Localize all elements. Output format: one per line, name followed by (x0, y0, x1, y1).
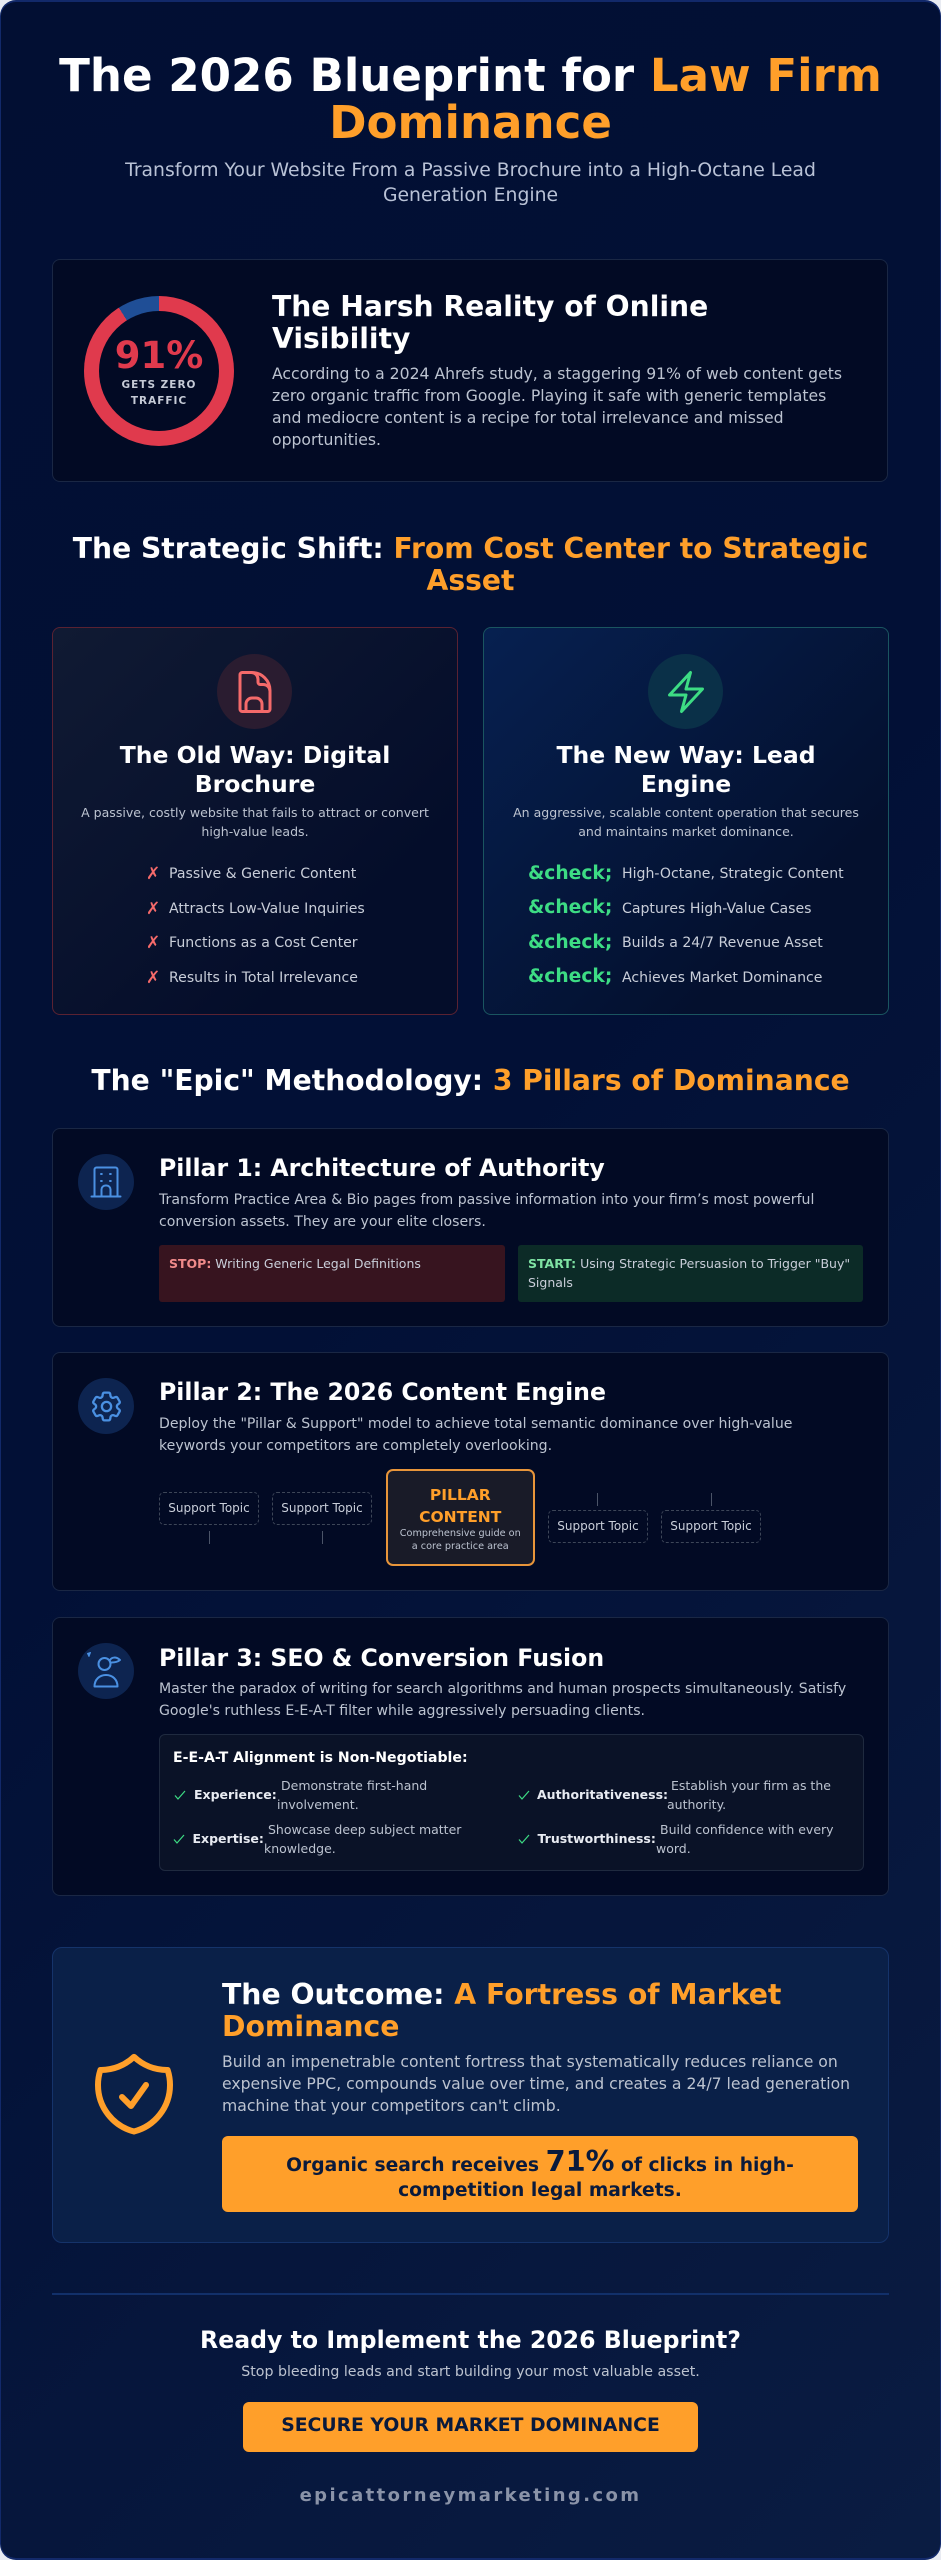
heading: strategic shift (72, 532, 868, 597)
item: Achieves Market Dominance (622, 970, 822, 986)
callout: stop: STOP: Writing Generic Legal Definitions (169, 1256, 421, 1271)
body: outcome: machine that your competitors can't climb. (222, 2096, 561, 2115)
icon: shield (95, 2054, 173, 2134)
stat callout: 71%: competition legal markets. (398, 2180, 682, 2201)
body: outcome: expensive PPC, compounds value over time, and creates a 24/7 lead generation (222, 2074, 850, 2093)
eeat item: experience: involvement. (277, 1797, 359, 1812)
title: Dominance (329, 96, 612, 149)
support topic 1 (159, 1492, 259, 1525)
heading: call to action: Ready to Implement the 2026 Blueprint? (200, 2326, 741, 2354)
item: &check; (528, 966, 612, 987)
panel: old way (52, 627, 458, 1015)
eeat item: expertise: Showcase deep subject matter (268, 1822, 461, 1837)
body: pillar 2 (159, 1416, 792, 1454)
donut label: GETS ZERO (122, 379, 196, 391)
heading: new way: The New Way: Lead (556, 741, 816, 769)
donut chart: 91 percent (84, 296, 234, 446)
body text: harsh reality: zero organic traffic from Google. Playing it safe with generic templates (272, 386, 826, 405)
heading: outcome (222, 1978, 781, 2043)
body: pillar 3: Master the paradox of writing for search algorithms and human prospects simultaneously. Satisfy (159, 1681, 846, 1697)
eeat item: experience: Experience: (194, 1787, 277, 1802)
heading: outcome: Dominance (222, 2010, 399, 2043)
body: pillar 2: Deploy the "Pillar & Support" model to achieve total semantic dominance over high-value (159, 1416, 792, 1432)
heading: old way: The Old Way: Digital (120, 741, 390, 769)
eeat item: authoritativeness: Authoritativeness: (537, 1787, 668, 1802)
support topic 3 (548, 1510, 648, 1543)
icon: bolt (648, 654, 723, 729)
body: outcome: Build an impenetrable content fortress that systematically reduces reliance on (222, 2052, 838, 2071)
panel: eeat (159, 1734, 864, 1871)
description: new way: An aggressive, scalable content operation that secures (513, 805, 859, 820)
pillar sub-label (400, 1528, 521, 1552)
support topic 1: Support Topic (168, 1501, 250, 1515)
title (59, 49, 882, 149)
description: old way: high-value leads. (201, 824, 309, 839)
icon: person (78, 1643, 134, 1699)
stat callout: 71% (222, 2136, 858, 2212)
body: pillar 1: conversion assets. They are your elite closers. (159, 1214, 486, 1230)
panel: outcome (52, 1947, 889, 2243)
body text: harsh reality: According to a 2024 Ahrefs study, a staggering 91% of web content gets (272, 364, 842, 383)
eeat item: expertise (174, 1822, 462, 1856)
item: &check; (528, 897, 612, 918)
eeat item: authoritativeness (518, 1778, 831, 1812)
panel: pillar 2 (52, 1352, 889, 1591)
callout: start: START: Using Strategic Persuasion to Trigger "Buy" (528, 1256, 850, 1271)
donut hole (99, 311, 219, 431)
body: pillar 3: Google's ruthless E-E-A-T filter while aggressively persuading clients. (159, 1703, 645, 1719)
donut label: TRAFFIC (131, 395, 187, 407)
panel: pillar 3 (52, 1617, 889, 1896)
eeat item: authoritativeness: authority. (667, 1797, 726, 1812)
support topic 2 (272, 1492, 372, 1525)
pillar label (419, 1486, 502, 1526)
eeat item: expertise: knowledge. (264, 1841, 336, 1856)
item: &check; (528, 862, 612, 884)
body text: harsh reality (272, 364, 842, 449)
eeat item: expertise: Expertise: (192, 1831, 264, 1846)
item: Results in Total Irrelevance (169, 970, 358, 986)
item: ✗ (146, 968, 160, 988)
body: pillar 2: keywords your competitors are completely overlooking. (159, 1438, 552, 1454)
callout: start: Signals (528, 1275, 573, 1290)
item: ✗ (146, 933, 160, 953)
eeat item: experience: Demonstrate first-hand (281, 1778, 427, 1793)
item: &check; (528, 932, 612, 952)
heading: new way: Engine (641, 770, 731, 798)
support topic 4 (661, 1510, 761, 1543)
item: Builds a 24/7 Revenue Asset (622, 935, 823, 951)
pillar content box (386, 1469, 535, 1566)
item (528, 862, 844, 884)
eeat item: trustworthiness (518, 1822, 834, 1856)
support topic 3: Support Topic (557, 1519, 639, 1533)
list: old way (146, 864, 365, 988)
heading: new way (556, 741, 816, 798)
heading: outcome: The Outcome: A Fortress of Market (222, 1978, 781, 2011)
eeat item: experience (174, 1778, 427, 1812)
description: new way (513, 805, 859, 839)
panel: pillar 1 (52, 1128, 889, 1327)
item: High-Octane, Strategic Content (622, 866, 844, 882)
body text: harsh reality: and mediocre content is a recipe for total irrelevance and missed (272, 408, 784, 427)
body: pillar 1 (158, 1192, 814, 1230)
pillar sub-label: Comprehensive guide on (400, 1528, 521, 1538)
heading: pillar 1: Pillar 1: Architecture of Authority (159, 1154, 605, 1182)
pillar label: CONTENT (419, 1508, 501, 1526)
item: ✗ (146, 898, 160, 918)
stat: 91%: 91% (115, 334, 203, 377)
heading: old way (120, 741, 390, 798)
heading: old way: Brochure (195, 770, 315, 798)
item: Captures High-Value Cases (622, 900, 812, 916)
item (528, 932, 823, 952)
body: outcome (222, 2052, 850, 2115)
divider (52, 2293, 889, 2295)
item (528, 966, 822, 987)
body text: harsh reality: opportunities. (272, 430, 381, 449)
item: Attracts Low-Value Inquiries (169, 900, 365, 916)
eeat item: trustworthiness: word. (656, 1841, 691, 1856)
support topic 4: Support Topic (670, 1519, 752, 1533)
heading: strategic shift: Asset (427, 564, 514, 597)
item: Functions as a Cost Center (169, 935, 358, 951)
heading: epic methodology: The "Epic" Methodology: 3 Pillars of Dominance (91, 1064, 850, 1097)
title: The 2026 Blueprint for Law Firm (59, 49, 882, 102)
heading: strategic shift: The Strategic Shift: From Cost Center to Strategic (73, 532, 868, 565)
eeat heading: E-E-A-T Alignment is Non-Negotiable: (173, 1750, 468, 1766)
body: pillar 1: Transform Practice Area & Bio pages from passive information into your firm’s most powerful (159, 1192, 814, 1208)
list: new way (528, 862, 844, 987)
heading: pillar 3: Pillar 3: SEO & Conversion Fusion (159, 1644, 604, 1672)
eeat item: trustworthiness: Build confidence with every (660, 1822, 834, 1837)
panel: new way (483, 627, 889, 1015)
button: call to action: SECURE YOUR MARKET DOMINANCE (281, 2415, 660, 2436)
stat callout: 71%: Organic search receives 71% of clicks in high- (286, 2144, 794, 2178)
item: Passive & Generic Content (169, 866, 356, 882)
panel: harsh reality (52, 259, 888, 482)
item: ✗ (146, 864, 160, 884)
button: call to action (243, 2402, 698, 2452)
callout: start (518, 1245, 863, 1302)
subtitle (125, 160, 816, 206)
body: pillar 3 (159, 1681, 846, 1719)
icon: gear (78, 1378, 134, 1434)
icon: building (78, 1154, 134, 1210)
subtitle: Generation Engine (383, 185, 558, 206)
description: old way: A passive, costly website that fails to attract or convert (81, 805, 429, 820)
pillar sub-label: a core practice area (412, 1540, 509, 1552)
description: old way (81, 805, 429, 839)
eeat item: trustworthiness: Trustworthiness: (538, 1831, 656, 1846)
item (528, 897, 812, 918)
support topic 2: Support Topic (281, 1501, 363, 1515)
eeat item: authoritativeness: Establish your firm as the (671, 1778, 831, 1793)
brand url: epicattorneymarketing.com (300, 2485, 641, 2506)
heading: harsh reality: The Harsh Reality of Online (272, 290, 708, 323)
callout: stop (159, 1245, 505, 1302)
subtitle: Transform Your Website From a Passive Brochure into a High-Octane Lead (125, 160, 816, 181)
pillar label: PILLAR (430, 1486, 491, 1504)
donut label (122, 379, 196, 407)
heading: harsh reality (272, 290, 708, 355)
subtext: call to action: Stop bleeding leads and start building your most valuable asset. (241, 2364, 700, 2380)
description: new way: and maintains market dominance. (578, 824, 794, 839)
icon: document (217, 654, 292, 729)
heading: harsh reality: Visibility (272, 322, 410, 355)
heading: pillar 2: Pillar 2: The 2026 Content Engine (159, 1378, 606, 1406)
